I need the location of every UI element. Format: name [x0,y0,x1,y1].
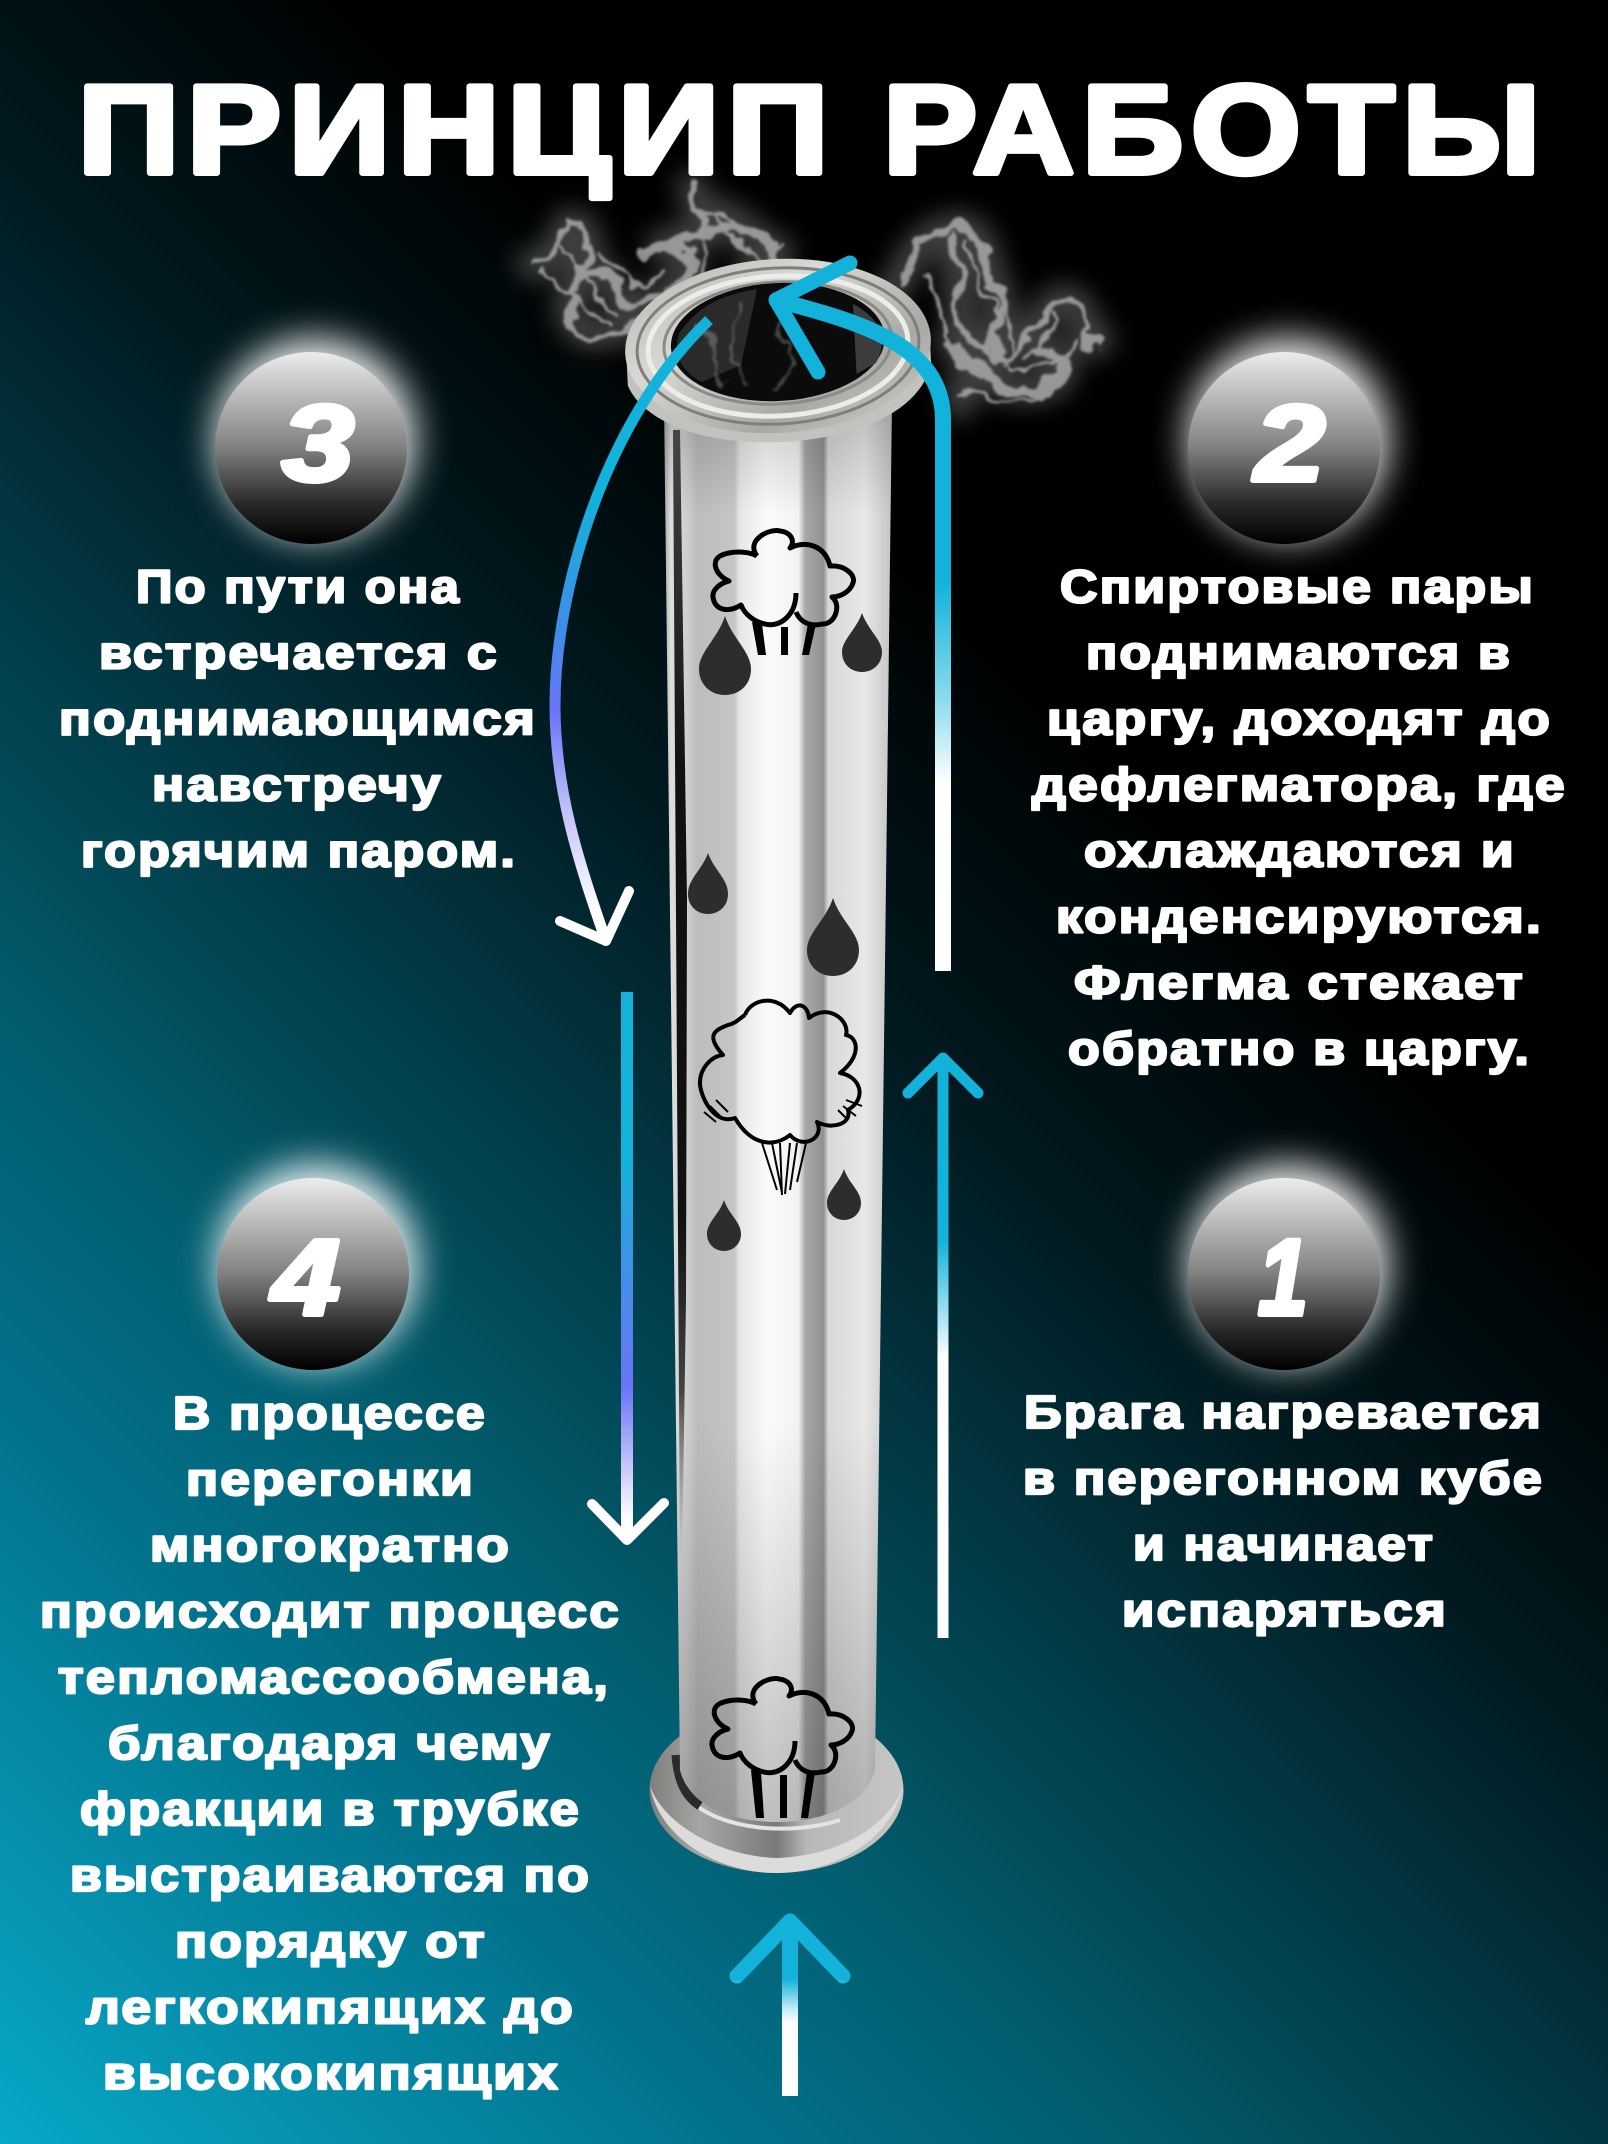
text block 4: благодаря чему [108,1717,552,1769]
text block 4: фракции в трубке [80,1783,581,1835]
text block 4: тепломассообмена, [58,1651,610,1703]
text block 3: По пути она [136,560,461,612]
text block 3 [59,560,537,876]
badge 4: 4 [270,1216,340,1338]
arrow: straight up bottom [737,1920,843,2096]
text block 2: поднимаются в [1086,626,1512,678]
badge 3: 3 [282,382,354,504]
cloud icon bottom [712,1679,852,1818]
text block 4: порядку от [175,1915,487,1967]
text block 2: царгу, доходят до [1047,692,1552,744]
text block 1: в перегонном кубе [1023,1452,1544,1504]
badge 3 [215,338,415,544]
text block 3: навстречу [152,758,443,810]
cloud icon top [713,531,853,655]
top flange [621,251,936,450]
text block 3: встречается с [99,626,499,678]
text block 1: Брага нагревается [1024,1386,1543,1438]
badge 2: 2 [1253,382,1325,504]
text block 4: В процессе [173,1387,487,1439]
text block 4: высококипящих [103,2047,560,2099]
drop [707,1200,741,1251]
drop [807,898,859,976]
text block 2: Флегма стекает [1074,956,1525,1008]
text block 2: Спиртовые пары [1060,560,1535,612]
dark backdrop behind smoke [510,160,1130,426]
bottom flange [650,1707,904,1873]
badge 1: 1 [1258,1216,1308,1338]
drop [699,616,751,695]
badge 4 [217,1164,417,1370]
column tube [664,400,892,1822]
text block 2: конденсируются. [1056,890,1543,942]
text block 3: горячим паром. [81,824,517,876]
smoke right [885,227,1100,405]
drop [842,613,882,672]
arrow: curved up [776,263,943,971]
text block 4: многократно [150,1519,511,1571]
text block 1: испаряться [1122,1584,1448,1636]
text block 2: обратно в царгу. [1068,1022,1531,1074]
arrow: straight up right [908,1056,978,1638]
text block 2: охлаждаются и [1084,824,1516,876]
title: ПРИНЦИП РАБОТЫ [78,59,1548,200]
text block 4: происходит процесс [40,1585,621,1637]
badge 1 [1188,1164,1388,1370]
smoke inside opening [700,300,790,390]
arrow: straight down [592,992,664,1540]
drop [827,1169,861,1220]
text block 3: поднимающимся [59,692,537,744]
text block 4: легкокипящих до [86,1981,575,2033]
text block 4 [40,1387,621,2099]
text block 2 [1032,560,1567,1074]
text block 1 [1023,1386,1544,1636]
drop [688,853,728,914]
text block 4: выстраиваются по [70,1849,591,1901]
arrow: curved down [555,320,709,941]
cloud icon middle [700,1001,862,1195]
text block 2: дефлегматора, где [1032,758,1567,810]
badge 2 [1188,338,1388,544]
smoke left [531,186,780,335]
text block 1: и начинает [1133,1518,1435,1570]
text block 4: перегонки [186,1453,475,1505]
